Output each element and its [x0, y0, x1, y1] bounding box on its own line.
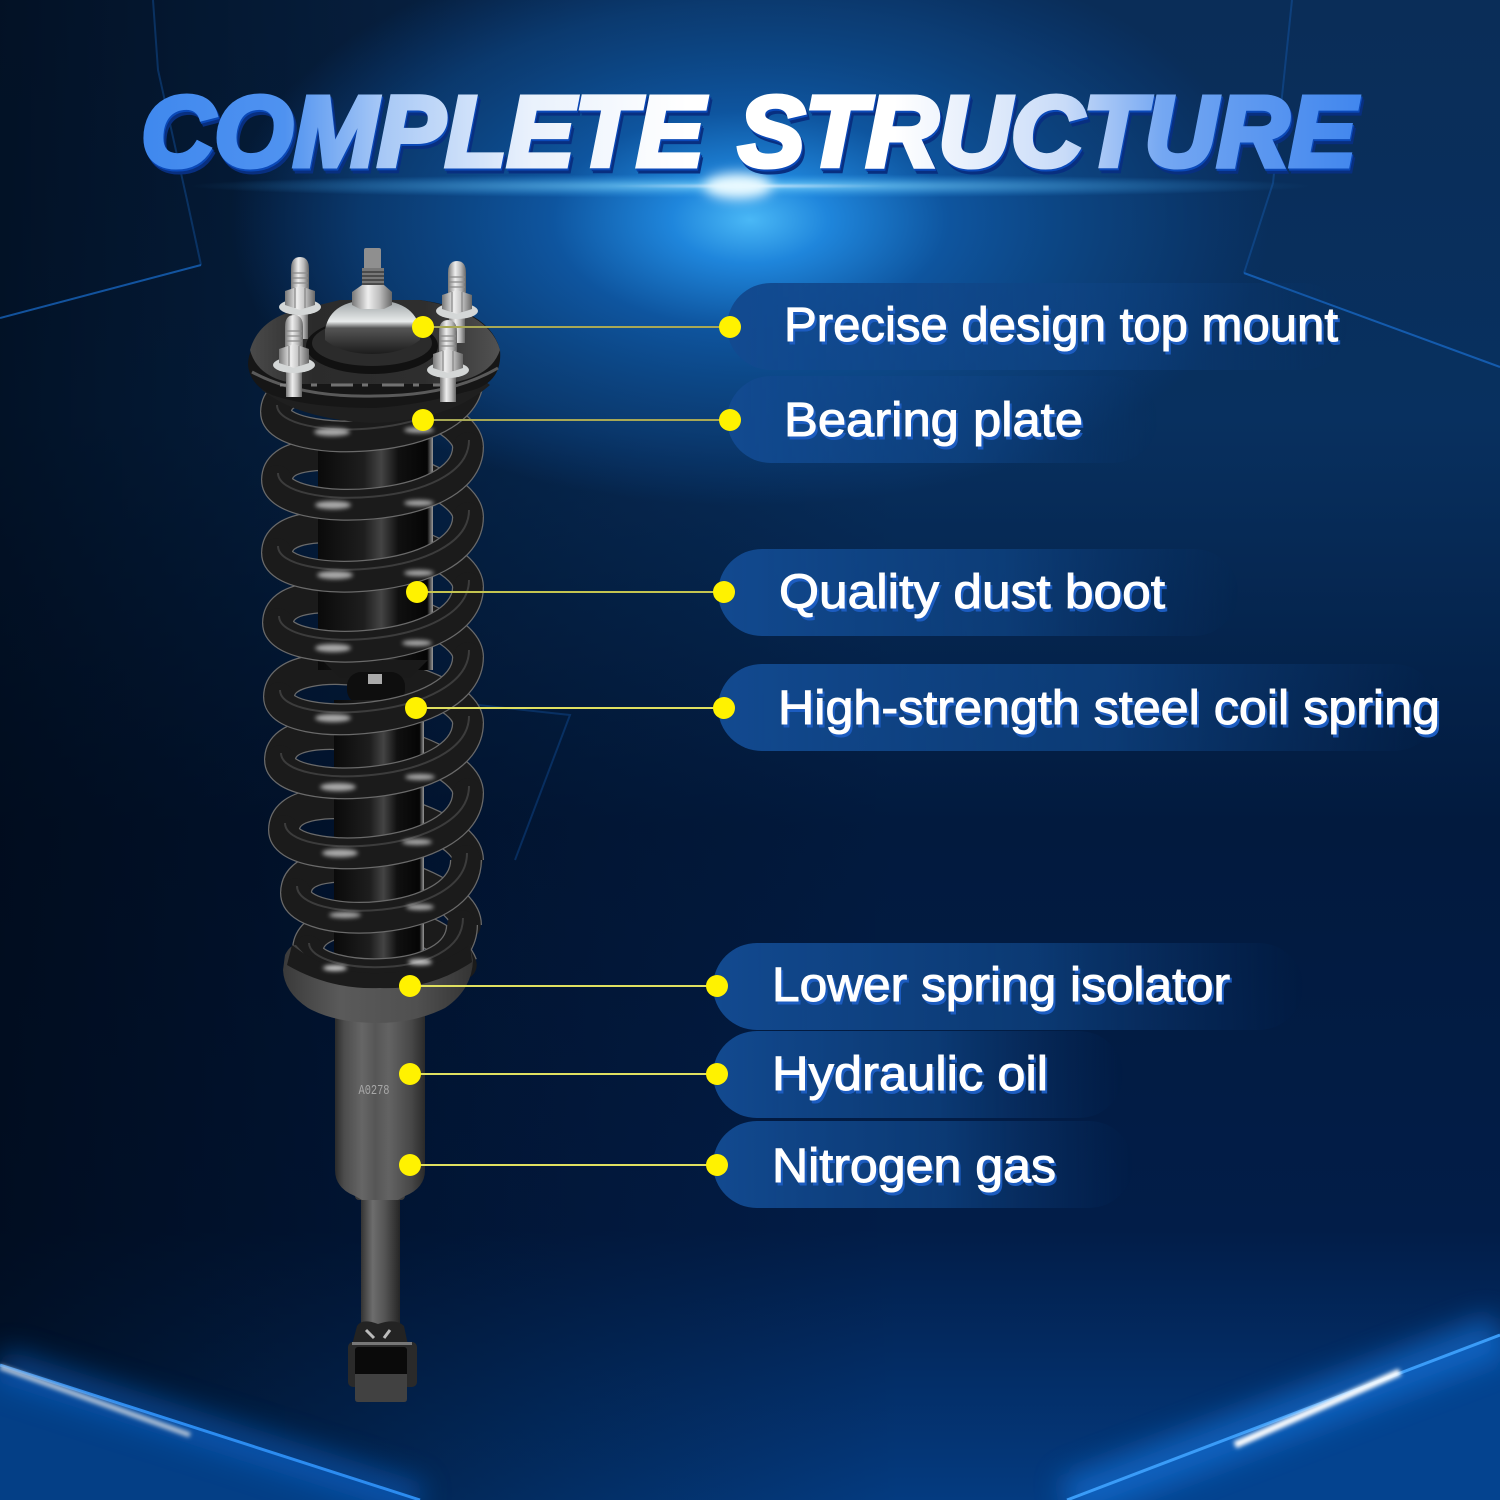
callout: Nitrogen gas: [399, 1140, 1056, 1193]
dust boot cylinder: [318, 420, 433, 960]
callout: Quality dust boot: Quality dust boot: [779, 566, 1165, 619]
title: STRUCTURE: [738, 76, 1359, 188]
callout: Precise design top mount: [412, 299, 1338, 352]
mounting bolts: [279, 257, 321, 339]
callout: Bearing plate: [412, 394, 1083, 447]
lower rod and eye mount: [348, 1190, 417, 1402]
label pills: [713, 283, 1438, 1208]
callout: Hydraulic oil: Hydraulic oil: [772, 1048, 1048, 1101]
callout: Nitrogen gas: Nitrogen gas: [772, 1140, 1056, 1193]
callout: High-strength steel coil spring: High-strength steel coil spring: [778, 682, 1440, 735]
strut body: [335, 1015, 425, 1200]
coil highlights: [314, 427, 435, 918]
callout: Hydraulic oil: [399, 1048, 1048, 1101]
callout: Quality dust boot: [406, 566, 1165, 619]
top mount plate: [248, 248, 500, 423]
rear coil turns: [276, 387, 468, 965]
callout: Bearing plate: Bearing plate: [784, 394, 1083, 447]
title: [141, 76, 1359, 188]
title: COMPLETE: [141, 76, 707, 188]
dome and centre stud: [325, 248, 420, 354]
lower spring isolator: [283, 945, 473, 1023]
part code: A0278: [358, 1083, 390, 1099]
front coil turns: [276, 371, 469, 974]
shock absorber strut assembly: [248, 248, 500, 1402]
callout: Lower spring isolator: Lower spring isolator: [772, 959, 1230, 1012]
callout: High-strength steel coil spring: [405, 682, 1440, 735]
callout: Lower spring isolator: [399, 959, 1230, 1012]
callout: Precise design top mount: Precise design top mount: [784, 299, 1338, 352]
